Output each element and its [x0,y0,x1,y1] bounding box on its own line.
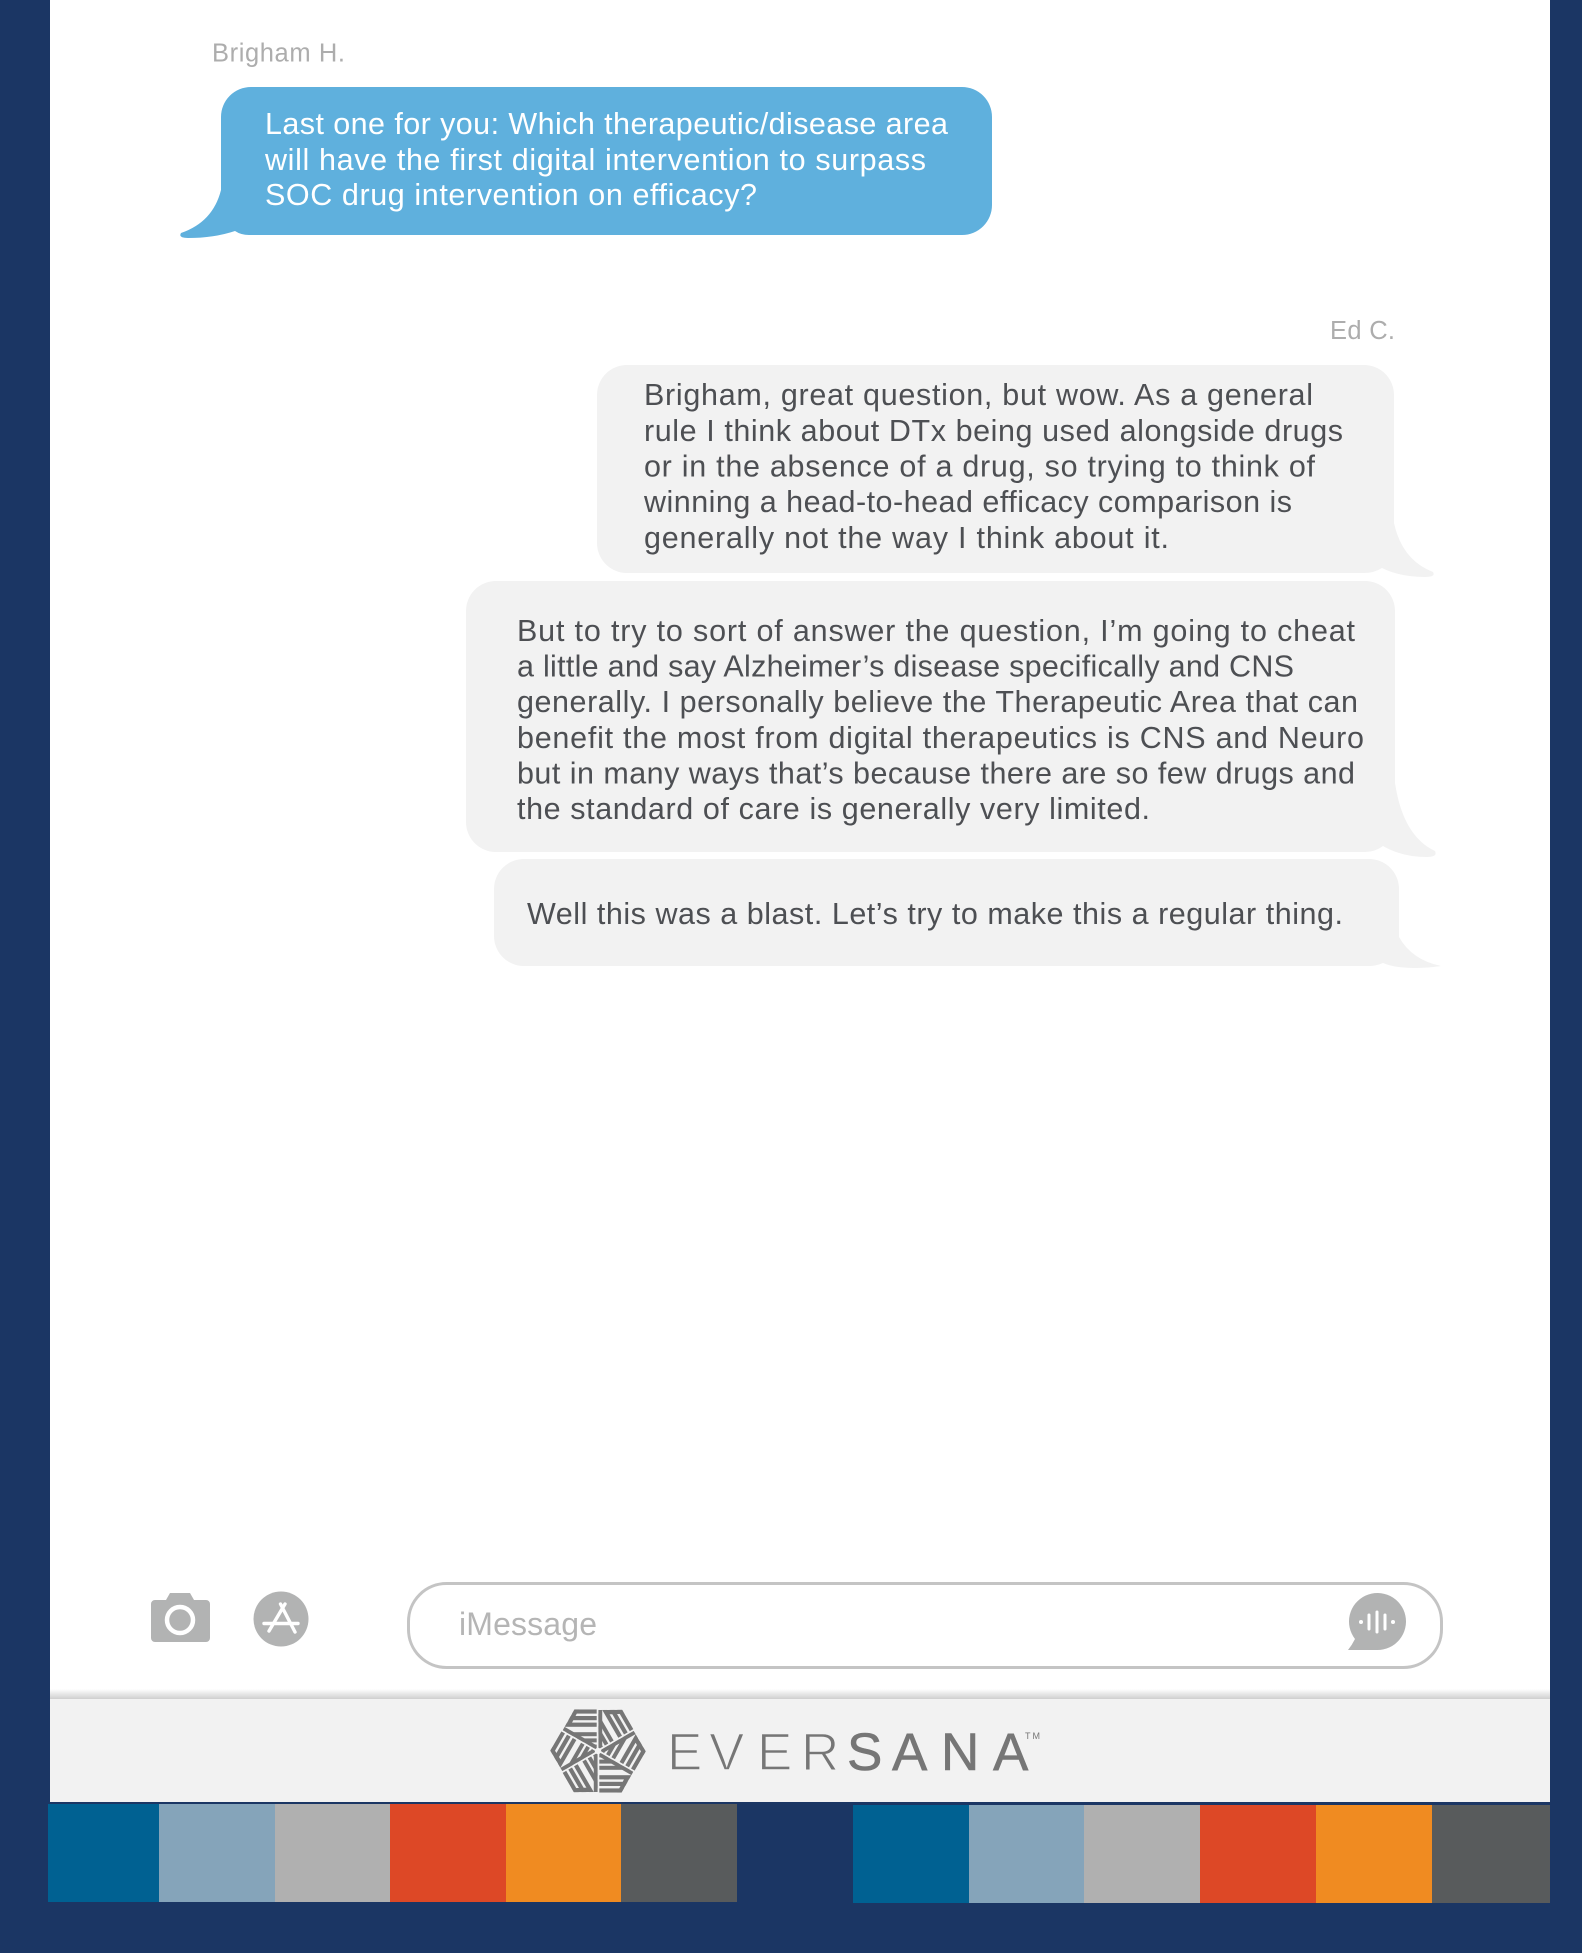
footer shadow [50,1689,1550,1699]
blue message bubble: SOC drug intervention on efficacy? [265,178,757,212]
EVERSANA wordmark [667,1723,1040,1782]
blue message bubble [180,87,992,238]
grey message bubble 1: or in the absence of a drug, so trying to think of [644,450,1316,484]
grey message bubble 2: but in many ways that’s because there are so few drugs and [517,756,1355,790]
grey message bubble 2: the standard of care is generally very limited. [517,792,1150,826]
colour swatches: left [48,1804,737,1902]
icon: EVERSANA logo [550,1709,646,1793]
message input field: iMessage [459,1606,597,1642]
sender name: Brigham H.: Brigham H. [212,40,345,68]
sender name: Ed C.: Ed C. [1330,317,1395,345]
footer bar [50,1696,1550,1806]
grey message bubble 2: a little and say Alzheimer’s disease specifically and CNS [517,650,1294,684]
blue message bubble: will have the first digital intervention to surpass [264,143,926,177]
grey message bubble 2: benefit the most from digital therapeutics is CNS and Neuro [517,721,1364,755]
icon: app store [254,1592,308,1646]
grey message bubble 2: But to try to sort of answer the question, I’m going to cheat [517,614,1356,648]
colour swatches: right [853,1805,1550,1903]
EVERSANA wordmark: SANA [847,1723,1029,1782]
grey message bubble 1: generally not the way I think about it. [644,521,1169,555]
message input field [408,1584,1442,1668]
grey message bubble 1: Brigham, great question, but wow. As a general [644,378,1313,412]
grey message bubble 1 [597,365,1434,577]
grey message bubble 2: generally. I personally believe the Therapeutic Area that can [517,685,1358,719]
grey message bubble 1: rule I think about DTx being used alongside drugs [644,414,1343,448]
grey message bubble 3 [494,859,1441,968]
grey message bubble 2 [466,581,1436,857]
EVERSANA wordmark: TM [1025,1731,1040,1741]
blue message bubble: Last one for you: Which therapeutic/disease area [265,107,948,141]
grey message bubble 1: winning a head-to-head efficacy comparison is [643,485,1292,519]
icon: camera [151,1593,210,1642]
EVERSANA wordmark: EVER [667,1723,839,1782]
icon: voice message [1348,1593,1406,1650]
grey message bubble 3: Well this was a blast. Let’s try to make this a regular thing. [527,897,1343,931]
